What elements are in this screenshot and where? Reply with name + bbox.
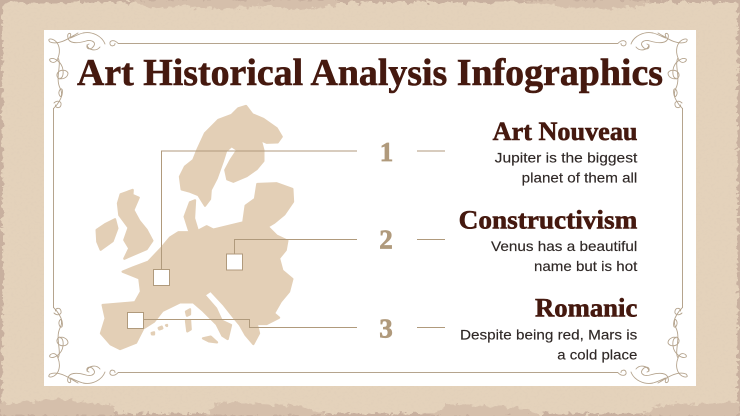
- description: name but is hot: [534, 258, 637, 274]
- number 3: 3: [379, 314, 393, 344]
- marker 1: [154, 270, 170, 286]
- Scandinavia: [180, 106, 282, 206]
- item: Constructivism: [459, 205, 638, 274]
- Ireland: [97, 219, 117, 250]
- dash 1: [417, 150, 445, 152]
- heading: Art Nouveau: [493, 117, 638, 146]
- dash 3: [417, 327, 445, 328]
- description: [460, 326, 638, 362]
- description: Despite being red, Mars is: [460, 326, 637, 342]
- description: planet of them all: [522, 170, 637, 186]
- description: a cold place: [557, 346, 638, 362]
- item: Art Nouveau: [493, 117, 638, 186]
- description: [495, 150, 637, 186]
- connector 3: [143, 320, 357, 328]
- item: Romanic: [460, 294, 638, 362]
- heading: Constructivism: [459, 205, 638, 234]
- Great Britain: [118, 190, 152, 259]
- heading: Romanic: [535, 294, 637, 323]
- Mediterranean islands: [152, 309, 217, 342]
- map of Europe: [97, 106, 293, 349]
- marker 3: [128, 312, 144, 328]
- description: [491, 238, 637, 274]
- description: Jupiter is the biggest: [495, 150, 637, 166]
- number 1: 1: [380, 137, 393, 167]
- ornamental frame: [49, 33, 687, 383]
- connector 2: [234, 240, 357, 254]
- title: Art Historical Analysis Infographics: [77, 52, 663, 94]
- marker 2: [226, 254, 242, 270]
- number 2: 2: [379, 224, 393, 254]
- white content panel: [44, 30, 696, 386]
- connector 1: [162, 151, 357, 270]
- Denmark: [185, 200, 197, 230]
- continental Europe: [101, 183, 293, 349]
- description: Venus has a beautiful: [491, 238, 637, 254]
- dash 2: [417, 239, 445, 240]
